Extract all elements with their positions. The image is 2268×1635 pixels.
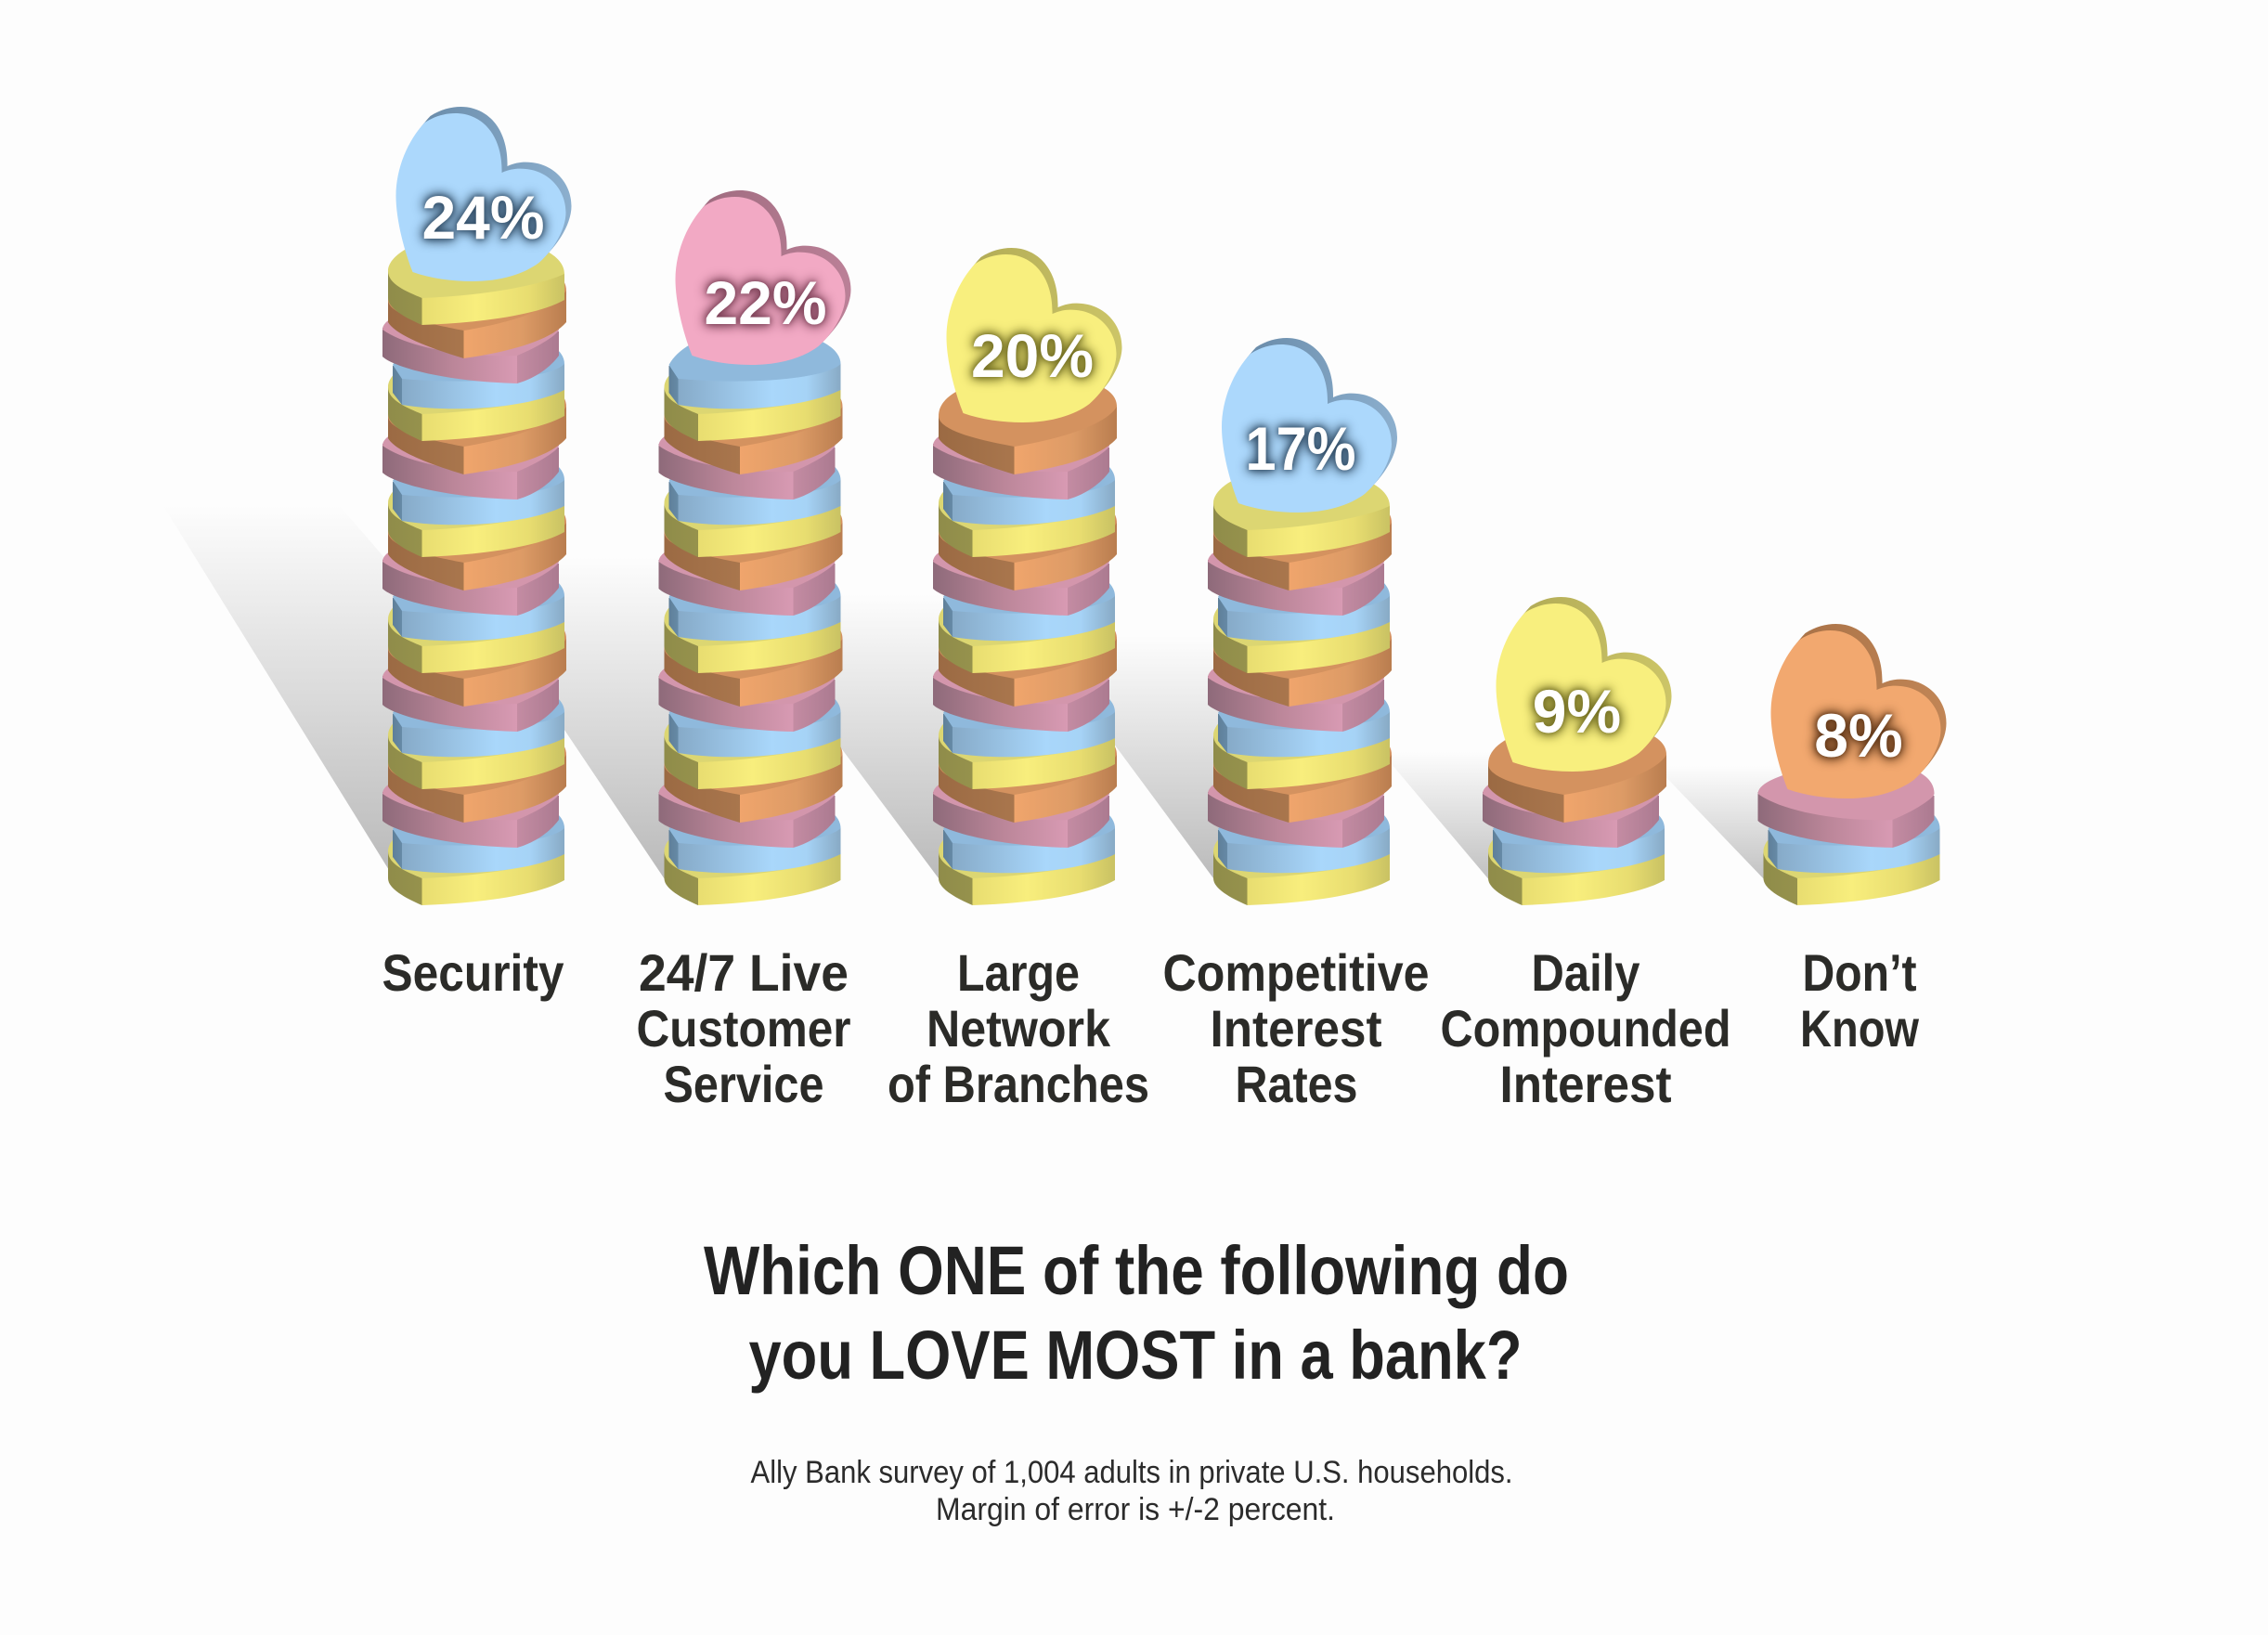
label: Large Network of Branches: Large	[957, 943, 1080, 1002]
column: Daily Compounded Interest stack	[1483, 724, 1666, 905]
title: Which ONE of the following do	[704, 1232, 1569, 1309]
label: Competitive Interest Rates	[1162, 943, 1430, 1113]
source note: Margin of error is +/-2 percent.	[936, 1492, 1335, 1527]
heart: 8%: 8%	[1814, 701, 1903, 770]
label: Don't Know: Know	[1800, 999, 1919, 1058]
heart: 24%: 24%	[421, 183, 545, 252]
source note: Ally Bank survey of 1,004 adults in private U.S. households.	[750, 1455, 1513, 1490]
heart: 20%	[947, 248, 1121, 422]
label: Don't Know	[1800, 943, 1919, 1058]
heart: 24%	[395, 107, 572, 281]
label: Large Network of Branches: Network	[927, 999, 1111, 1058]
column: Security stack	[382, 235, 566, 905]
label: 24/7 Live Customer Service: Service	[663, 1055, 824, 1113]
cast shadows behind the stacks	[163, 506, 1875, 882]
label: 24/7 Live Customer Service: Customer	[637, 999, 850, 1058]
label: 24/7 Live Customer Service	[637, 943, 850, 1113]
label: Daily Compounded Interest: Compounded	[1441, 999, 1730, 1058]
column: Large Network of Branches stack	[933, 376, 1117, 905]
heart: 9%: 9%	[1533, 677, 1621, 746]
heart: 17%	[1222, 338, 1397, 513]
label: Security: Security	[382, 943, 564, 1002]
heart: 17%: 17%	[1246, 414, 1355, 483]
label: Daily Compounded Interest: Interest	[1500, 1055, 1671, 1113]
heart: 22%: 22%	[704, 268, 827, 337]
label: 24/7 Live Customer Service: 24/7 Live	[639, 943, 849, 1002]
label: Competitive Interest Rates: Competitive	[1162, 943, 1430, 1002]
heart: 9%	[1497, 597, 1671, 772]
heart: 8%	[1771, 624, 1946, 798]
column: 24/7 Live Customer Service stack	[659, 329, 843, 905]
label: Daily Compounded Interest: Daily	[1532, 943, 1639, 1002]
label: Large Network of Branches: of Branches	[888, 1055, 1149, 1113]
label: Large Network of Branches	[888, 943, 1149, 1113]
label: Competitive Interest Rates: Interest	[1211, 999, 1381, 1058]
label: Daily Compounded Interest	[1441, 943, 1730, 1113]
title	[704, 1232, 1569, 1394]
label: Don't Know: Don’t	[1803, 943, 1916, 1002]
label: Competitive Interest Rates: Rates	[1235, 1055, 1357, 1113]
heart: 20%: 20%	[971, 321, 1094, 390]
column: Competitive Interest Rates stack	[1208, 467, 1392, 905]
column: Don't Know stack	[1758, 761, 1940, 905]
title: you LOVE MOST in a bank?	[748, 1317, 1523, 1394]
source note	[750, 1455, 1513, 1527]
heart: 22%	[676, 190, 850, 365]
